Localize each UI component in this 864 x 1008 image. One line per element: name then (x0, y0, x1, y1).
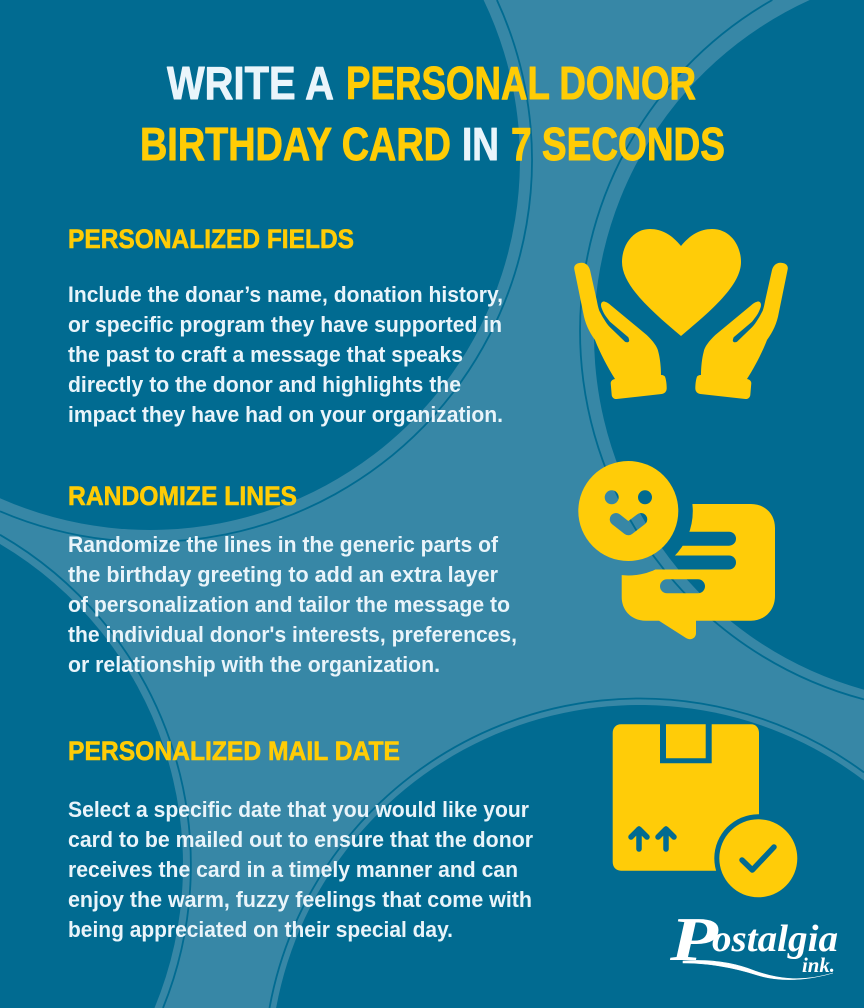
text block: personalized mail date: being appreciated on their special day. (68, 917, 453, 942)
text block: personalized fields: directly to the donor and highlights the (68, 372, 461, 397)
logo: Postalgia ink: ostalgia (712, 918, 838, 960)
logo: Postalgia ink (669, 906, 838, 980)
icon: package with check mark (613, 724, 797, 897)
heading: personalized mail date: PERSONALIZED MAIL DATE (68, 736, 400, 766)
logo: Postalgia ink: ink. (802, 953, 835, 977)
text block: randomize lines (68, 532, 517, 677)
text block: randomize lines: or relationship with the organization. (68, 652, 440, 677)
text block: randomize lines: Randomize the lines in the generic parts of (68, 532, 499, 557)
title: IN (462, 118, 499, 170)
title: WRITE A (167, 57, 334, 109)
text block: randomize lines: the birthday greeting to add an extra layer (68, 562, 498, 587)
text block: randomize lines: the individual donor's interests, preferences, (68, 622, 517, 647)
title (140, 57, 725, 170)
text block: personalized fields: Include the donar’s name, donation history, (68, 282, 503, 307)
text block: personalized mail date: receives the card in a timely manner and can (68, 857, 518, 882)
text block: personalized fields: the past to craft a message that speaks (68, 342, 463, 367)
text block: personalized mail date: Select a specific date that you would like your (68, 797, 529, 822)
text block: personalized mail date (68, 797, 533, 942)
icon: smiley and chat bubble (578, 461, 775, 639)
heading: personalized fields: PERSONALIZED FIELDS (68, 224, 354, 254)
heading: randomize lines: RANDOMIZE LINES (68, 481, 297, 511)
title: BIRTHDAY CARD (140, 118, 451, 170)
text block: personalized mail date: card to be mailed out to ensure that the donor (68, 827, 533, 852)
text block: personalized mail date: enjoy the warm, fuzzy feelings that come with (68, 887, 532, 912)
text block: personalized fields: impact they have had on your organization. (68, 402, 503, 427)
text block: personalized fields (68, 282, 503, 427)
text block: randomize lines: of personalization and tailor the message to (68, 592, 510, 617)
logo: Postalgia ink: P (669, 906, 719, 974)
text block: personalized fields: or specific program they have supported in (68, 312, 502, 337)
title: 7 SECONDS (511, 118, 725, 170)
icon: heart in hands (574, 229, 788, 399)
title: PERSONAL DONOR (346, 57, 696, 109)
